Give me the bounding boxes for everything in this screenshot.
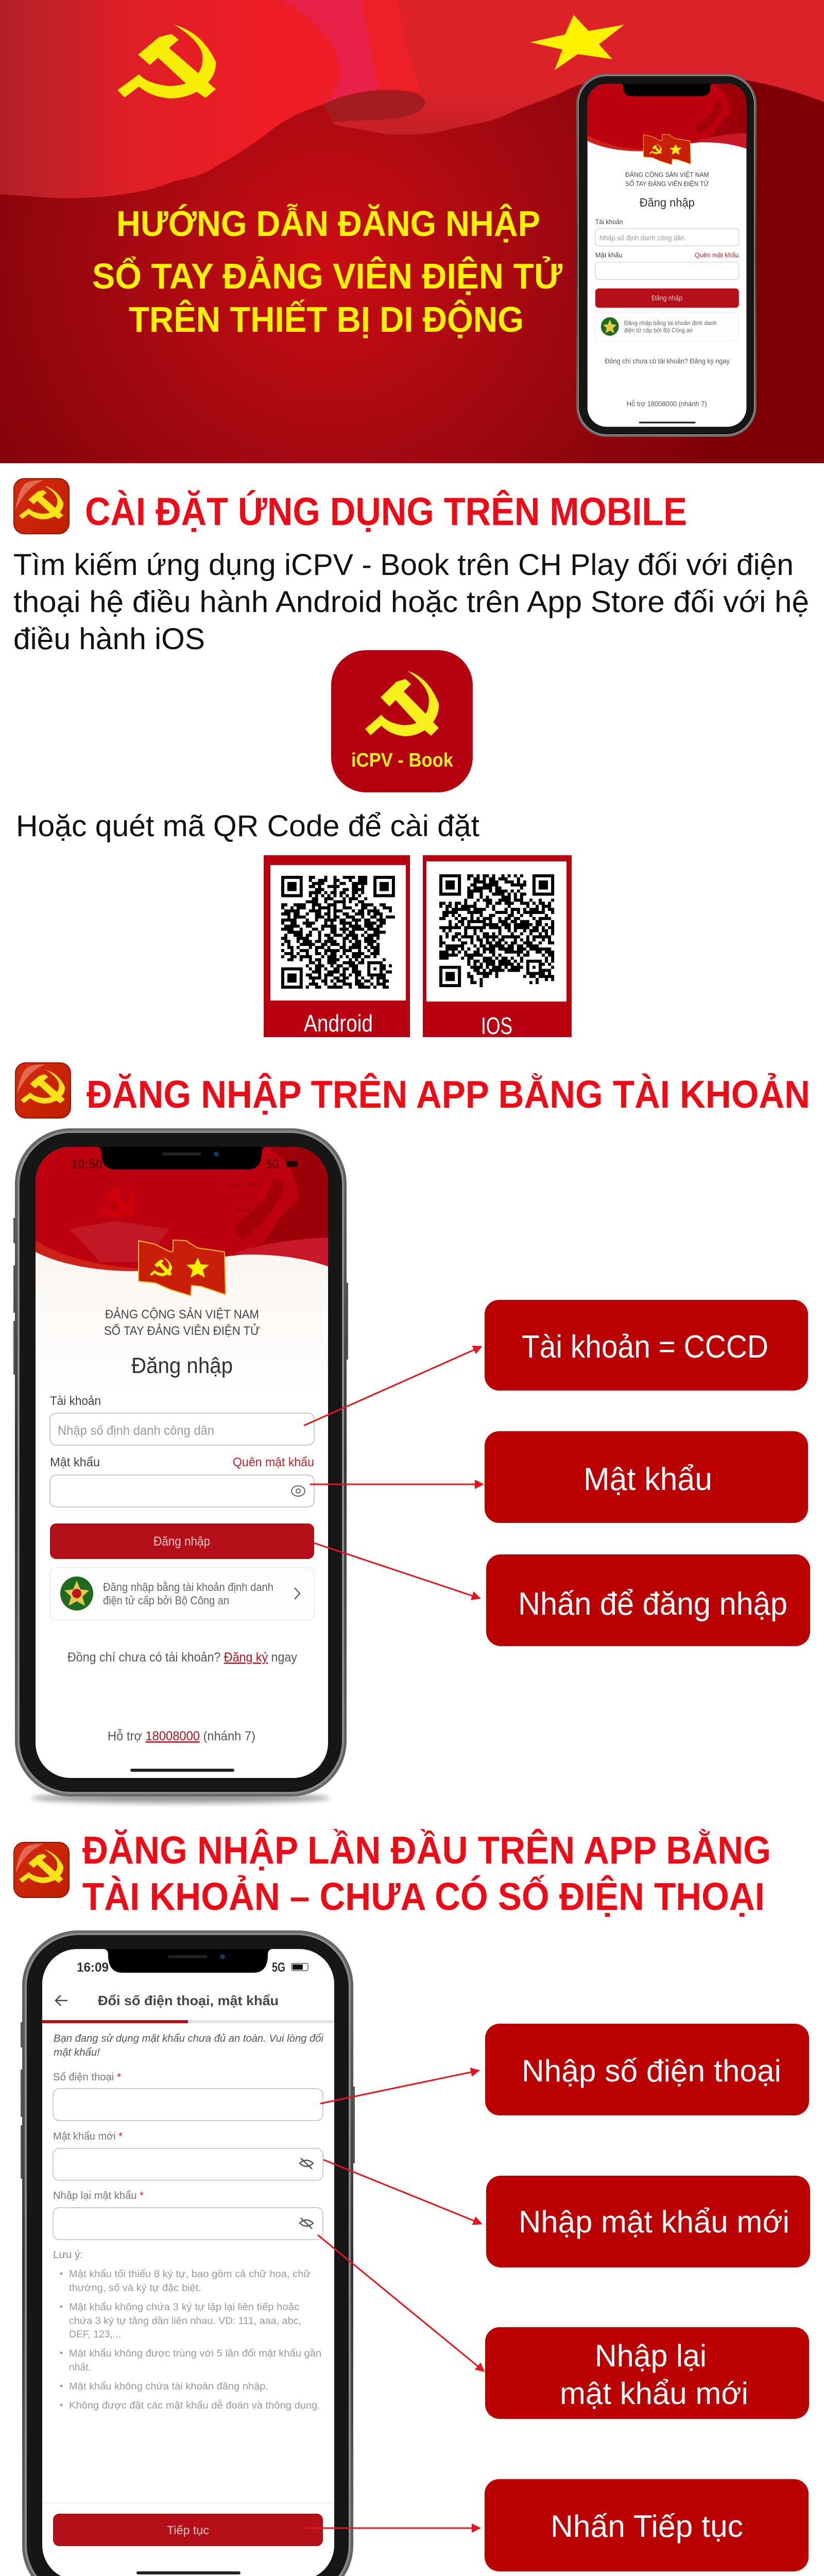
banner phone mockup: Đồng chí chưa có tài khoản? Đăng ký ngay [605,357,730,365]
banner title: TRÊN THIẾT BỊ DI ĐỘNG [129,299,524,340]
heading text: CÀI ĐẶT ỨNG DỤNG TRÊN MOBILE [85,489,687,534]
arrow: to account callout [304,1347,481,1426]
login button [50,1523,314,1559]
callout: press to login: Nhấn để đăng nhập [518,1586,787,1622]
callout: password: Mật khẩu [583,1462,712,1497]
support text: Hỗ trợ 18008000 (nhánh 7) [108,1728,255,1743]
QR card: iOS [423,855,572,1039]
QR code Android [281,876,395,989]
arrow: to phone number callout [320,2071,478,2104]
flag bright fold strip [355,0,421,93]
install instructions text: điều hành iOS [13,622,205,656]
notes: Mật khẩu không chứa tài khoản đăng nhập. [69,2381,268,2392]
flag right part [323,0,824,135]
banner phone mockup: Hỗ trợ 18008000 (nhánh 7) [627,400,707,408]
callout: re-enter new password: mật khẩu mới [560,2376,748,2411]
banner phone mockup: ĐẢNG CỘNG SẢN VIỆT NAM [625,171,709,179]
callout: re-enter new password [485,2327,809,2419]
icon: hammer and sickle [117,25,216,98]
phone number field [53,2072,323,2121]
banner phone mockup: Quên mật khẩu [695,251,739,259]
status bar: 16:09 [77,1960,109,1975]
QR card: Android: Android [304,1010,373,1037]
arrow: to password callout [310,1484,483,1485]
red top background [36,1147,328,1271]
screen heading: Đăng nhập [131,1353,233,1378]
banner phone mockup: điện tử cấp bởi Bộ Công an [624,327,693,334]
banner phone mockup: Nhập số định danh công dân [599,234,684,242]
password field: Quên mật khẩu [233,1455,314,1469]
account field [50,1394,314,1445]
banner phone mockup: Tài khoản [595,218,623,226]
flag left part [0,0,340,198]
callout: password [485,1431,808,1523]
icon: iCPV Book app: iCPV - Book [351,750,454,771]
status bar: 5G [267,1156,279,1172]
notch [97,1147,266,1170]
install instructions text [13,548,809,656]
app title: SỔ TAY ĐẢNG VIÊN ĐIỆN TỬ [104,1323,260,1338]
new password field [53,2131,323,2180]
banner phone mockup: Đăng nhập [640,196,695,209]
notch [104,1949,272,1973]
notes: nhất. [69,2362,91,2373]
callout: press to login [486,1554,810,1646]
callout: account equals ID card: Tài khoản = CCCD [522,1329,768,1365]
heading text: ĐĂNG NHẬP LẦN ĐẦU TRÊN APP BẰNG [82,1828,771,1872]
callout: re-enter new password: Nhập lại [595,2338,707,2373]
arrow: to re-enter password callout [318,2235,484,2371]
status bar: 5G [272,1960,285,1975]
icon: party badge [14,1842,69,1897]
flag logo [139,1240,226,1296]
heading: login with account [15,1063,810,1118]
password field: Mật khẩu [50,1455,100,1469]
icon: party badge [15,1063,71,1118]
heading: install app [14,479,687,534]
warning text: Bạn đang sử dụng mật khẩu chưa đủ an toàn. Vui lòng đổi [54,2033,324,2044]
login button: Đăng nhập [153,1534,210,1549]
notes: DEF, 123,... [69,2329,121,2340]
install instructions text: thoại hệ điều hành Android hoặc trên App Store đối với hệ [13,585,809,619]
continue button [53,2514,323,2546]
notes: Mật khẩu không chứa 3 ký tự lặp lại liên tiếp hoặc [69,2302,299,2313]
heading: first login [14,1828,771,1918]
confirm password field: Nhập lại mật khẩu * [53,2190,144,2201]
heading text: TÀI KHOẢN – CHƯA CÓ SỐ ĐIỆN THOẠI [82,1875,765,1918]
install instructions text: Tìm kiếm ứng dụng iCPV - Book trên CH Play đối với điện [13,548,794,582]
banner phone mockup: Đăng nhập bằng tài khoản định danh [624,319,717,327]
banner phone mockup: Đăng nhập [651,294,682,302]
callout: press continue [485,2479,809,2571]
account field: Nhập số định danh công dân [58,1423,214,1438]
notes: Mật khẩu tối thiểu 8 ký tự, bao gồm cả chữ hoa, chữ [69,2269,311,2280]
lower ribbons [36,1241,154,1271]
register text: Đồng chí chưa có tài khoản? Đăng ký ngay [67,1650,297,1665]
flag pink fold [268,0,380,104]
phone number field: Số điện thoại * [53,2072,121,2083]
callout: enter phone number: Nhập số điện thoại [522,2054,781,2088]
public security login option: Đăng nhập bằng tài khoản định danh [103,1581,273,1594]
QR code iOS [439,874,554,987]
header banner [0,0,824,463]
callout: press continue: Nhấn Tiếp tục [551,2509,743,2544]
public security login option [50,1568,314,1620]
banner phone mockup: SỔ TAY ĐẢNG VIÊN ĐIỆN TỬ [625,180,709,188]
continue button: Tiếp tục [167,2523,209,2537]
banner title: HƯỚNG DẪN ĐĂNG NHẬP [116,203,540,244]
phone: login screen [13,1128,348,1803]
callout: account equals ID card [485,1300,808,1391]
banner phone mockup [576,74,757,437]
warning text: mật khẩu! [54,2047,100,2058]
callout: enter phone number [485,2024,809,2115]
arrow: to new password callout [323,2160,481,2224]
faint emblem [97,1183,135,1217]
notes: thường, số và ký tự đặc biệt. [69,2283,201,2294]
arrow: to login callout [314,1543,479,1598]
account field: Tài khoản [50,1394,101,1408]
notes: Mật khẩu không được trùng với 5 lần đổi mật khẩu gần [69,2348,321,2359]
QR card: Android [264,855,410,1037]
QR card: iOS: IOS [481,1012,512,1039]
screen title bar: Đổi số điện thoại, mật khẩu [98,1993,279,2008]
status bar [71,1156,279,1172]
notes [53,2249,321,2411]
screen [36,1147,328,1778]
banner background [0,0,824,463]
banner phone mockup: Mật khẩu [595,251,623,259]
notes: Lưu ý: [53,2249,83,2261]
callout: enter new password: Nhập mật khẩu mới [519,2205,789,2239]
portrait silhouette [230,1178,284,1240]
icon: iCPV Book app [331,650,473,792]
password field [50,1455,314,1507]
arrow: to continue callout [306,2528,479,2529]
banner title [92,203,563,340]
flag curl [323,90,425,122]
banner title: SỔ TAY ĐẢNG VIÊN ĐIỆN TỬ [92,256,563,296]
phone: change phone number and password screen [21,1930,355,2576]
notes: Không được đặt các mật khẩu dễ đoán và thông dụng. [69,2400,320,2411]
confirm password field [53,2190,323,2240]
status bar: 10:50 [71,1156,102,1172]
icon: yellow star [530,15,624,70]
new password field: Mật khẩu mới * [53,2131,123,2142]
screen [42,1949,334,2576]
heading text [82,1828,771,1918]
app title [104,1307,260,1338]
status bar [77,1960,285,1975]
notes: chứa 3 ký tự tăng dần liên nhau. VD: 111, aaa, abc, [69,2316,301,2327]
icon: party badge [14,479,69,534]
public security login option: điện tử cấp bởi Bộ Công an [103,1594,229,1607]
callout: enter new password [486,2176,810,2267]
QR instruction text: Hoặc quét mã QR Code để cài đặt [16,809,479,843]
warning text [54,2033,324,2058]
app title: ĐẢNG CỘNG SẢN VIỆT NAM [105,1307,259,1321]
progress bar [42,2020,334,2023]
